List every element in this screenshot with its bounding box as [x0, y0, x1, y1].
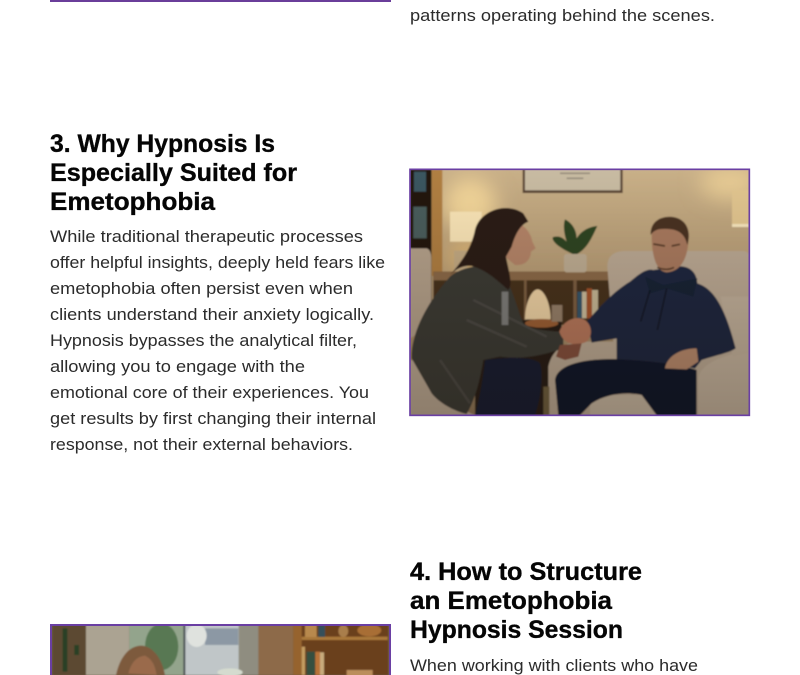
text: section 4 body start: When working with clients who have	[410, 657, 698, 675]
heading: section 4: Hypnosis Session	[410, 616, 623, 644]
text block: section 3 body: emetophobia often persist even when	[50, 280, 353, 298]
heading: section 4	[410, 558, 642, 644]
picture frame	[523, 167, 623, 193]
text block: section 3 body: allowing you to engage with the	[50, 358, 305, 376]
text block: section 3 body: Hypnosis bypasses the analytical filter,	[50, 332, 357, 350]
therapist head and hair	[505, 223, 536, 265]
text block: section 3 body: clients understand their anxiety logically.	[50, 306, 374, 324]
heading: section 3: Especially Suited for	[50, 159, 297, 187]
therapist legs	[475, 358, 542, 415]
plant	[553, 219, 597, 255]
text block: section 3 body: get results by first changing their internal	[50, 410, 376, 428]
right armchair	[548, 251, 749, 415]
heading: section 3: 3. Why Hypnosis Is	[50, 130, 275, 158]
client hoodie	[587, 266, 736, 368]
heading: section 4: 4. How to Structure	[410, 558, 642, 586]
client hand	[665, 348, 698, 369]
heading: section 4: an Emetophobia	[410, 587, 613, 615]
text block: section 3 body: offer helpful insights, deeply held fears like	[50, 254, 385, 272]
therapist sweater	[412, 266, 563, 414]
photo: woman by a window with bookshelf	[50, 623, 390, 675]
clasped hands	[559, 318, 591, 344]
heading: section 3: Emetophobia	[50, 188, 216, 216]
text: end of previous paragraph: patterns operating behind the scenes.	[410, 7, 715, 25]
client head	[651, 228, 688, 274]
heading: section 3	[50, 130, 297, 216]
image border: previous section photo bottom edge	[50, 0, 391, 2]
text block: section 3 body: emotional core of their experiences. You	[50, 384, 369, 402]
left lamp	[450, 212, 482, 242]
text block: section 3 body: While traditional therapeutic processes	[50, 228, 363, 246]
left armchair	[410, 248, 431, 338]
bookshelf left	[410, 169, 432, 303]
client legs	[555, 359, 697, 415]
shelf unit and dark floor gap	[432, 279, 611, 326]
text block: section 3 body	[50, 228, 385, 454]
right lamp	[732, 192, 748, 224]
diffuser	[525, 289, 551, 319]
photo: therapist holding client's hand in a warm room	[410, 167, 760, 415]
text block: section 3 body: response, not their external behaviors.	[50, 436, 353, 454]
